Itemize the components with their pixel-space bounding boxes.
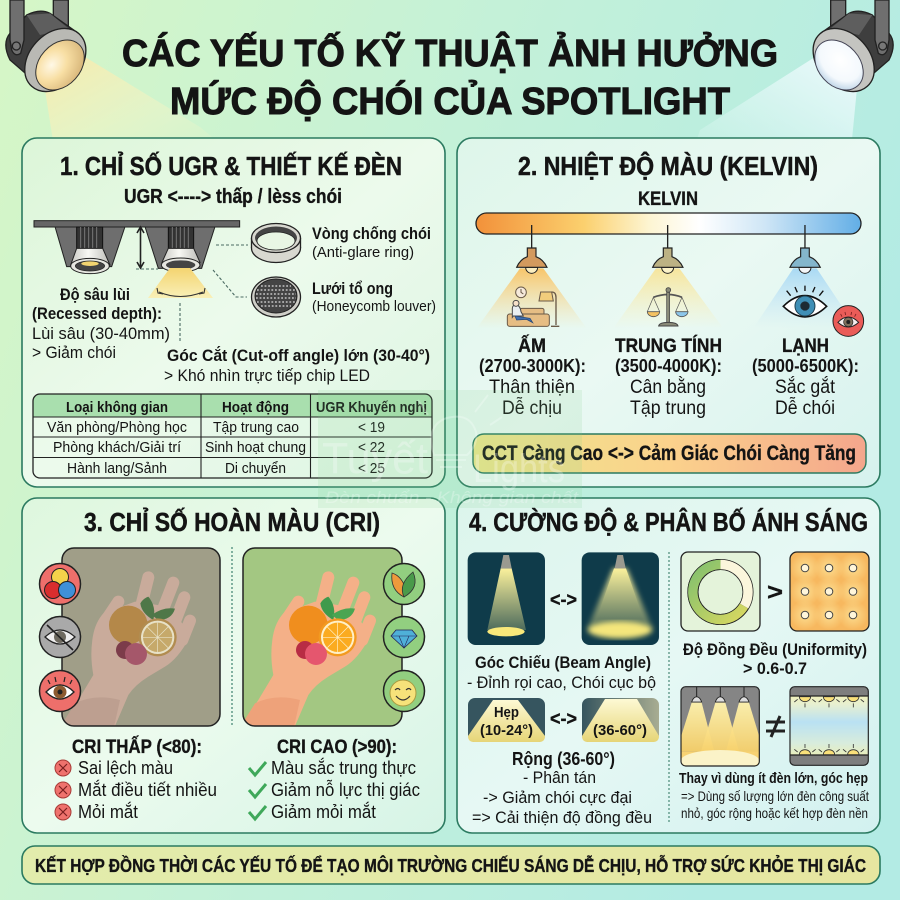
- table: recommended UGR: Di chuyển: [225, 460, 286, 477]
- spotlight beam: warm: [45, 57, 240, 160]
- watermark: Lights: [473, 447, 565, 491]
- label: wide angle benefits: -> Giảm chói cực đại: [483, 788, 632, 807]
- diagram: wide angle: (36-60°): [593, 722, 647, 739]
- icon: color wheel: [40, 564, 80, 604]
- label: cut-off angle: Góc Cắt (Cut-off angle) lớn (30-40°): [167, 346, 430, 365]
- label: honeycomb louver: (Honeycomb louver): [312, 298, 436, 315]
- icon: smile: [384, 670, 424, 712]
- label: recessed depth: [32, 285, 170, 362]
- icon: cool spotlight: [801, 0, 893, 104]
- label: beam angle: Góc Chiếu (Beam Angle): [475, 653, 651, 672]
- diagram: wide angle: [582, 698, 659, 742]
- table: recommended UGR: < 25: [358, 460, 385, 477]
- diagram: narrow angle: (10-24°): [480, 722, 533, 739]
- label: warm: ẤM: [518, 335, 546, 357]
- bottom banner: [22, 846, 880, 884]
- heading: section 2: 2. NHIỆT ĐỘ MÀU (KELVIN): [518, 151, 818, 181]
- label: honeycomb louver: [312, 279, 436, 315]
- title: [122, 30, 778, 123]
- label: recessed depth: > Giảm chói: [32, 343, 116, 362]
- label: low CRI: [55, 736, 217, 822]
- label: warm: [479, 335, 586, 419]
- symbol: not equal: [766, 716, 785, 737]
- table: recommended UGR: Tập trung cao: [213, 419, 299, 436]
- label: recessed depth: Lùi sâu (30-40mm): [32, 324, 170, 343]
- table: recommended UGR: Phòng khách/Giải trí: [53, 439, 182, 456]
- kelvin gradient bar: [476, 213, 861, 234]
- label: cut-off angle: > Khó nhìn trực tiếp chip LED: [164, 366, 370, 385]
- spotlight beam: cool: [690, 57, 857, 160]
- label: Kelvin: KELVIN: [638, 189, 698, 210]
- label: low CRI: Mỏi mắt: [78, 801, 138, 822]
- diagram: many small lamps: [790, 687, 868, 766]
- table: recommended UGR: Sinh hoạt chung: [205, 439, 306, 456]
- divider: dotted: [668, 552, 670, 822]
- divider: dotted: [231, 547, 233, 726]
- label: neutral: Cân bằng: [630, 376, 706, 398]
- label: uniformity: [683, 640, 867, 678]
- diagram: cut-off light cone: [148, 268, 213, 298]
- arrow: angle comparison: <->: [550, 709, 577, 730]
- table: recommended UGR: UGR Khuyến nghị: [316, 399, 427, 416]
- panel: UGR and fixture design: [22, 138, 445, 487]
- label: high CRI: Giảm nỗ lực thị giác: [271, 779, 420, 800]
- label: beam angle: - Đỉnh rọi cao, Chói cục bộ: [467, 673, 656, 692]
- title: MỨC ĐỘ CHÓI CỦA SPOTLIGHT: [170, 78, 730, 123]
- table: recommended UGR: Hành lang/Sảnh: [67, 460, 167, 477]
- icon: warm pendant lamp with living room: [477, 225, 587, 328]
- icon: tired eye: [40, 670, 80, 712]
- watermark: Tuyết: [322, 434, 428, 483]
- callout: CCT: [473, 434, 866, 473]
- leader lines: [136, 245, 248, 341]
- text: advice: nhỏ, góc rộng hoặc kết hợp đèn nền: [681, 805, 868, 821]
- photo: high CRI hand with fruit: [238, 548, 402, 730]
- arrow: recessed depth: [137, 227, 144, 268]
- label: cool: [752, 336, 859, 419]
- diagram: narrow angle: [468, 698, 545, 742]
- icon: warm spotlight: [6, 0, 98, 104]
- label: recessed depth: Độ sâu lùi: [60, 285, 130, 304]
- label: wide angle benefits: [472, 749, 652, 827]
- label: uniformity: Độ Đồng Đều (Uniformity): [683, 640, 867, 659]
- label: honeycomb louver: Lưới tổ ong: [312, 279, 393, 298]
- icon: diamond: [384, 616, 424, 658]
- photo: low CRI hand with fruit: [58, 548, 220, 730]
- label: wide angle benefits: - Phân tán: [523, 768, 596, 787]
- label: high CRI: [249, 737, 420, 822]
- label: anti-glare ring: Vòng chống chói: [312, 224, 431, 243]
- label: anti-glare ring: [312, 224, 431, 261]
- label: neutral: [615, 335, 722, 419]
- icon: crossed eye: [40, 616, 80, 658]
- icon: LED grid panel: [790, 552, 869, 631]
- label: high CRI: Giảm mỏi mắt: [271, 801, 376, 822]
- symbol: greater than: >: [767, 579, 783, 606]
- table: recommended UGR: Hoạt động: [222, 399, 289, 416]
- icon: neutral pendant lamp with scale: [613, 225, 723, 328]
- heading: section 3: 3. CHỈ SỐ HOÀN MÀU (CRI): [84, 507, 380, 537]
- diagram: narrow beam: [468, 552, 545, 645]
- arrow: beam comparison: <->: [550, 590, 577, 611]
- panel: color rendering index: [22, 498, 445, 833]
- icon: leaves: [384, 564, 424, 604]
- label: high CRI: CRI CAO (>90):: [277, 737, 397, 758]
- panel: color temperature: [457, 138, 880, 487]
- label: neutral: Tập trung: [630, 398, 706, 419]
- label: low CRI: CRI THẤP (<80):: [72, 736, 202, 758]
- watermark: [318, 390, 582, 508]
- label: warm: Dễ chịu: [502, 397, 562, 419]
- label: wide angle benefits: Rộng (36-60°): [512, 749, 615, 769]
- table: recommended UGR: [33, 394, 432, 478]
- label: wide angle benefits: => Cải thiện độ đồng đều: [472, 808, 652, 827]
- icon: honeycomb louver: [252, 277, 300, 317]
- icon: anti-glare ring: [252, 224, 300, 262]
- text: advice: Thay vì dùng ít đèn lớn, góc hẹp: [679, 771, 868, 787]
- text: advice: [679, 771, 869, 821]
- label: cool: Dễ chói: [775, 397, 835, 419]
- icon: cool pendant lamp with eye: [753, 225, 864, 336]
- label: warm: (2700-3000K):: [479, 356, 586, 376]
- table: recommended UGR: Văn phòng/Phòng học: [47, 419, 187, 436]
- label: cool: Sắc gắt: [775, 376, 836, 398]
- subheading: UGR: UGR <----> thấp / lèss chói: [124, 186, 342, 208]
- label: anti-glare ring: (Anti-glare ring): [312, 244, 414, 261]
- label: uniformity: > 0.6-0.7: [743, 659, 807, 678]
- label: low CRI: Mắt điều tiết nhiều: [78, 779, 217, 800]
- table: recommended UGR: < 22: [358, 439, 385, 456]
- panel: intensity and distribution: [457, 498, 880, 833]
- watermark: Đèn chuẩn - Không gian chất: [325, 488, 579, 507]
- label: high CRI: Màu sắc trung thực: [271, 757, 416, 778]
- title: CÁC YẾU TỐ KỸ THUẬT ẢNH HƯỞNG: [122, 30, 778, 75]
- label: cool: LẠNH: [782, 336, 829, 357]
- label: cut-off angle: [164, 346, 430, 385]
- label: low CRI: Sai lệch màu: [78, 758, 173, 778]
- table: recommended UGR: < 19: [358, 419, 385, 436]
- label: recessed depth: (Recessed depth):: [32, 304, 162, 323]
- label: neutral: TRUNG TÍNH: [615, 335, 722, 357]
- diagram: few narrow lamps: [681, 687, 759, 771]
- icon: uniform ring: [681, 552, 760, 631]
- label: neutral: (3500-4000K):: [615, 356, 722, 376]
- table: recommended UGR: Loại không gian: [66, 399, 168, 416]
- label: cool: (5000-6500K):: [752, 356, 859, 376]
- label: warm: Thân thiện: [489, 377, 575, 398]
- diagram: recessed downlights: [34, 221, 240, 274]
- diagram: wide beam: [582, 552, 659, 645]
- label: beam angle: [467, 653, 656, 692]
- heading: section 1: 1. CHỈ SỐ UGR & THIẾT KẾ ĐÈN: [60, 151, 402, 181]
- diagram: narrow angle: Hẹp: [494, 704, 519, 721]
